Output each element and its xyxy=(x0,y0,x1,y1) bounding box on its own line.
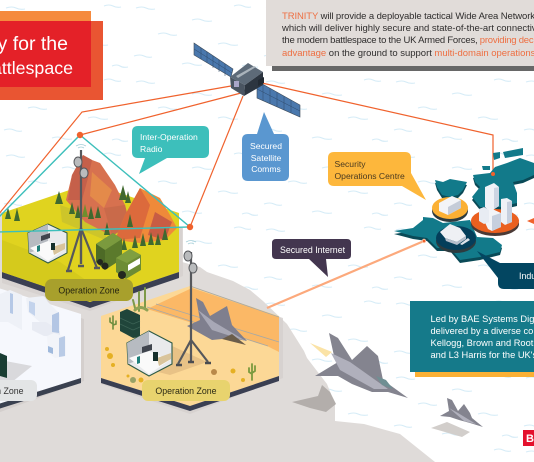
yellow site disc xyxy=(432,196,468,222)
trees xyxy=(5,185,168,250)
text block: delivery: Kellogg, Brown and Root xyxy=(430,338,534,348)
jet: small Typhoon xyxy=(440,398,483,427)
map link markers xyxy=(422,172,534,243)
callout: secured internet: Secured Internet xyxy=(280,245,346,255)
text block: introduction: advantage on the ground to support multi-domain operations. xyxy=(282,48,534,59)
teal radio links xyxy=(0,135,190,232)
label: operation zone snow xyxy=(0,380,37,401)
jet shadow small xyxy=(431,422,470,437)
server rack xyxy=(120,309,140,338)
callout: inter-operation radio xyxy=(132,126,209,174)
callout: secured internet xyxy=(272,239,351,277)
left solar panel xyxy=(194,43,233,77)
jet on runway xyxy=(187,298,247,345)
label: operation zone mountain: Operation Zone xyxy=(58,286,120,296)
text block: delivery: and L3 Harris for the UK's xyxy=(430,350,534,360)
panel: TRINITY introduction xyxy=(266,0,534,71)
callout: secured satellite comms: Secured xyxy=(250,141,282,151)
callout: secured satellite comms: Comms xyxy=(251,164,281,174)
cactus plants xyxy=(110,288,255,380)
heading: title text xyxy=(0,33,73,78)
text block: delivery xyxy=(430,314,534,360)
link nodes xyxy=(77,132,193,230)
orange satellite links xyxy=(0,83,493,227)
text block: introduction xyxy=(281,11,534,59)
army truck xyxy=(96,233,141,279)
orange site disc xyxy=(471,183,519,236)
callout: security operations centre: Operations Centre xyxy=(334,171,405,181)
desert bushes xyxy=(105,347,245,383)
server rack xyxy=(0,353,7,378)
hexagon: snow operation zone xyxy=(0,286,84,414)
land mass xyxy=(0,212,435,462)
navy site disc xyxy=(436,224,476,253)
callout: inter-operation radio: Inter-Operation xyxy=(140,132,198,142)
callout: secured satellite comms: Satellite xyxy=(251,153,282,163)
label: operation zone desert xyxy=(142,380,230,401)
map of the UK and Europe xyxy=(394,148,534,263)
label: operation zone mountain xyxy=(45,279,133,301)
mountains xyxy=(66,155,177,243)
label: operation zone desert: Operation Zone xyxy=(155,386,217,396)
callout: security operations centre xyxy=(328,152,426,200)
right solar panel xyxy=(257,81,300,117)
jet shadow large xyxy=(292,385,336,412)
callout: secured satellite comms xyxy=(242,112,289,181)
jet: large Typhoon xyxy=(310,333,408,398)
logo: BAE Systems xyxy=(523,430,534,446)
callout: industry xyxy=(477,251,534,289)
office room xyxy=(127,331,172,376)
callout: inter-operation radio: Radio xyxy=(140,144,163,154)
panel: BAE Systems delivery xyxy=(410,301,534,377)
text block: introduction: TRINITY will provide a deployable tactical Wide Area Network xyxy=(282,11,534,22)
hexagon: desert operation zone xyxy=(101,240,283,414)
callout: security operations centre: Security xyxy=(334,159,366,169)
radio mast xyxy=(66,144,100,271)
ice blocks xyxy=(0,290,66,358)
office room xyxy=(28,224,67,263)
satellite xyxy=(194,43,300,117)
secured internet link xyxy=(267,241,424,308)
panel: title xyxy=(0,11,103,100)
hexagon: mountain operation zone xyxy=(2,144,183,311)
radio mast xyxy=(176,240,211,365)
